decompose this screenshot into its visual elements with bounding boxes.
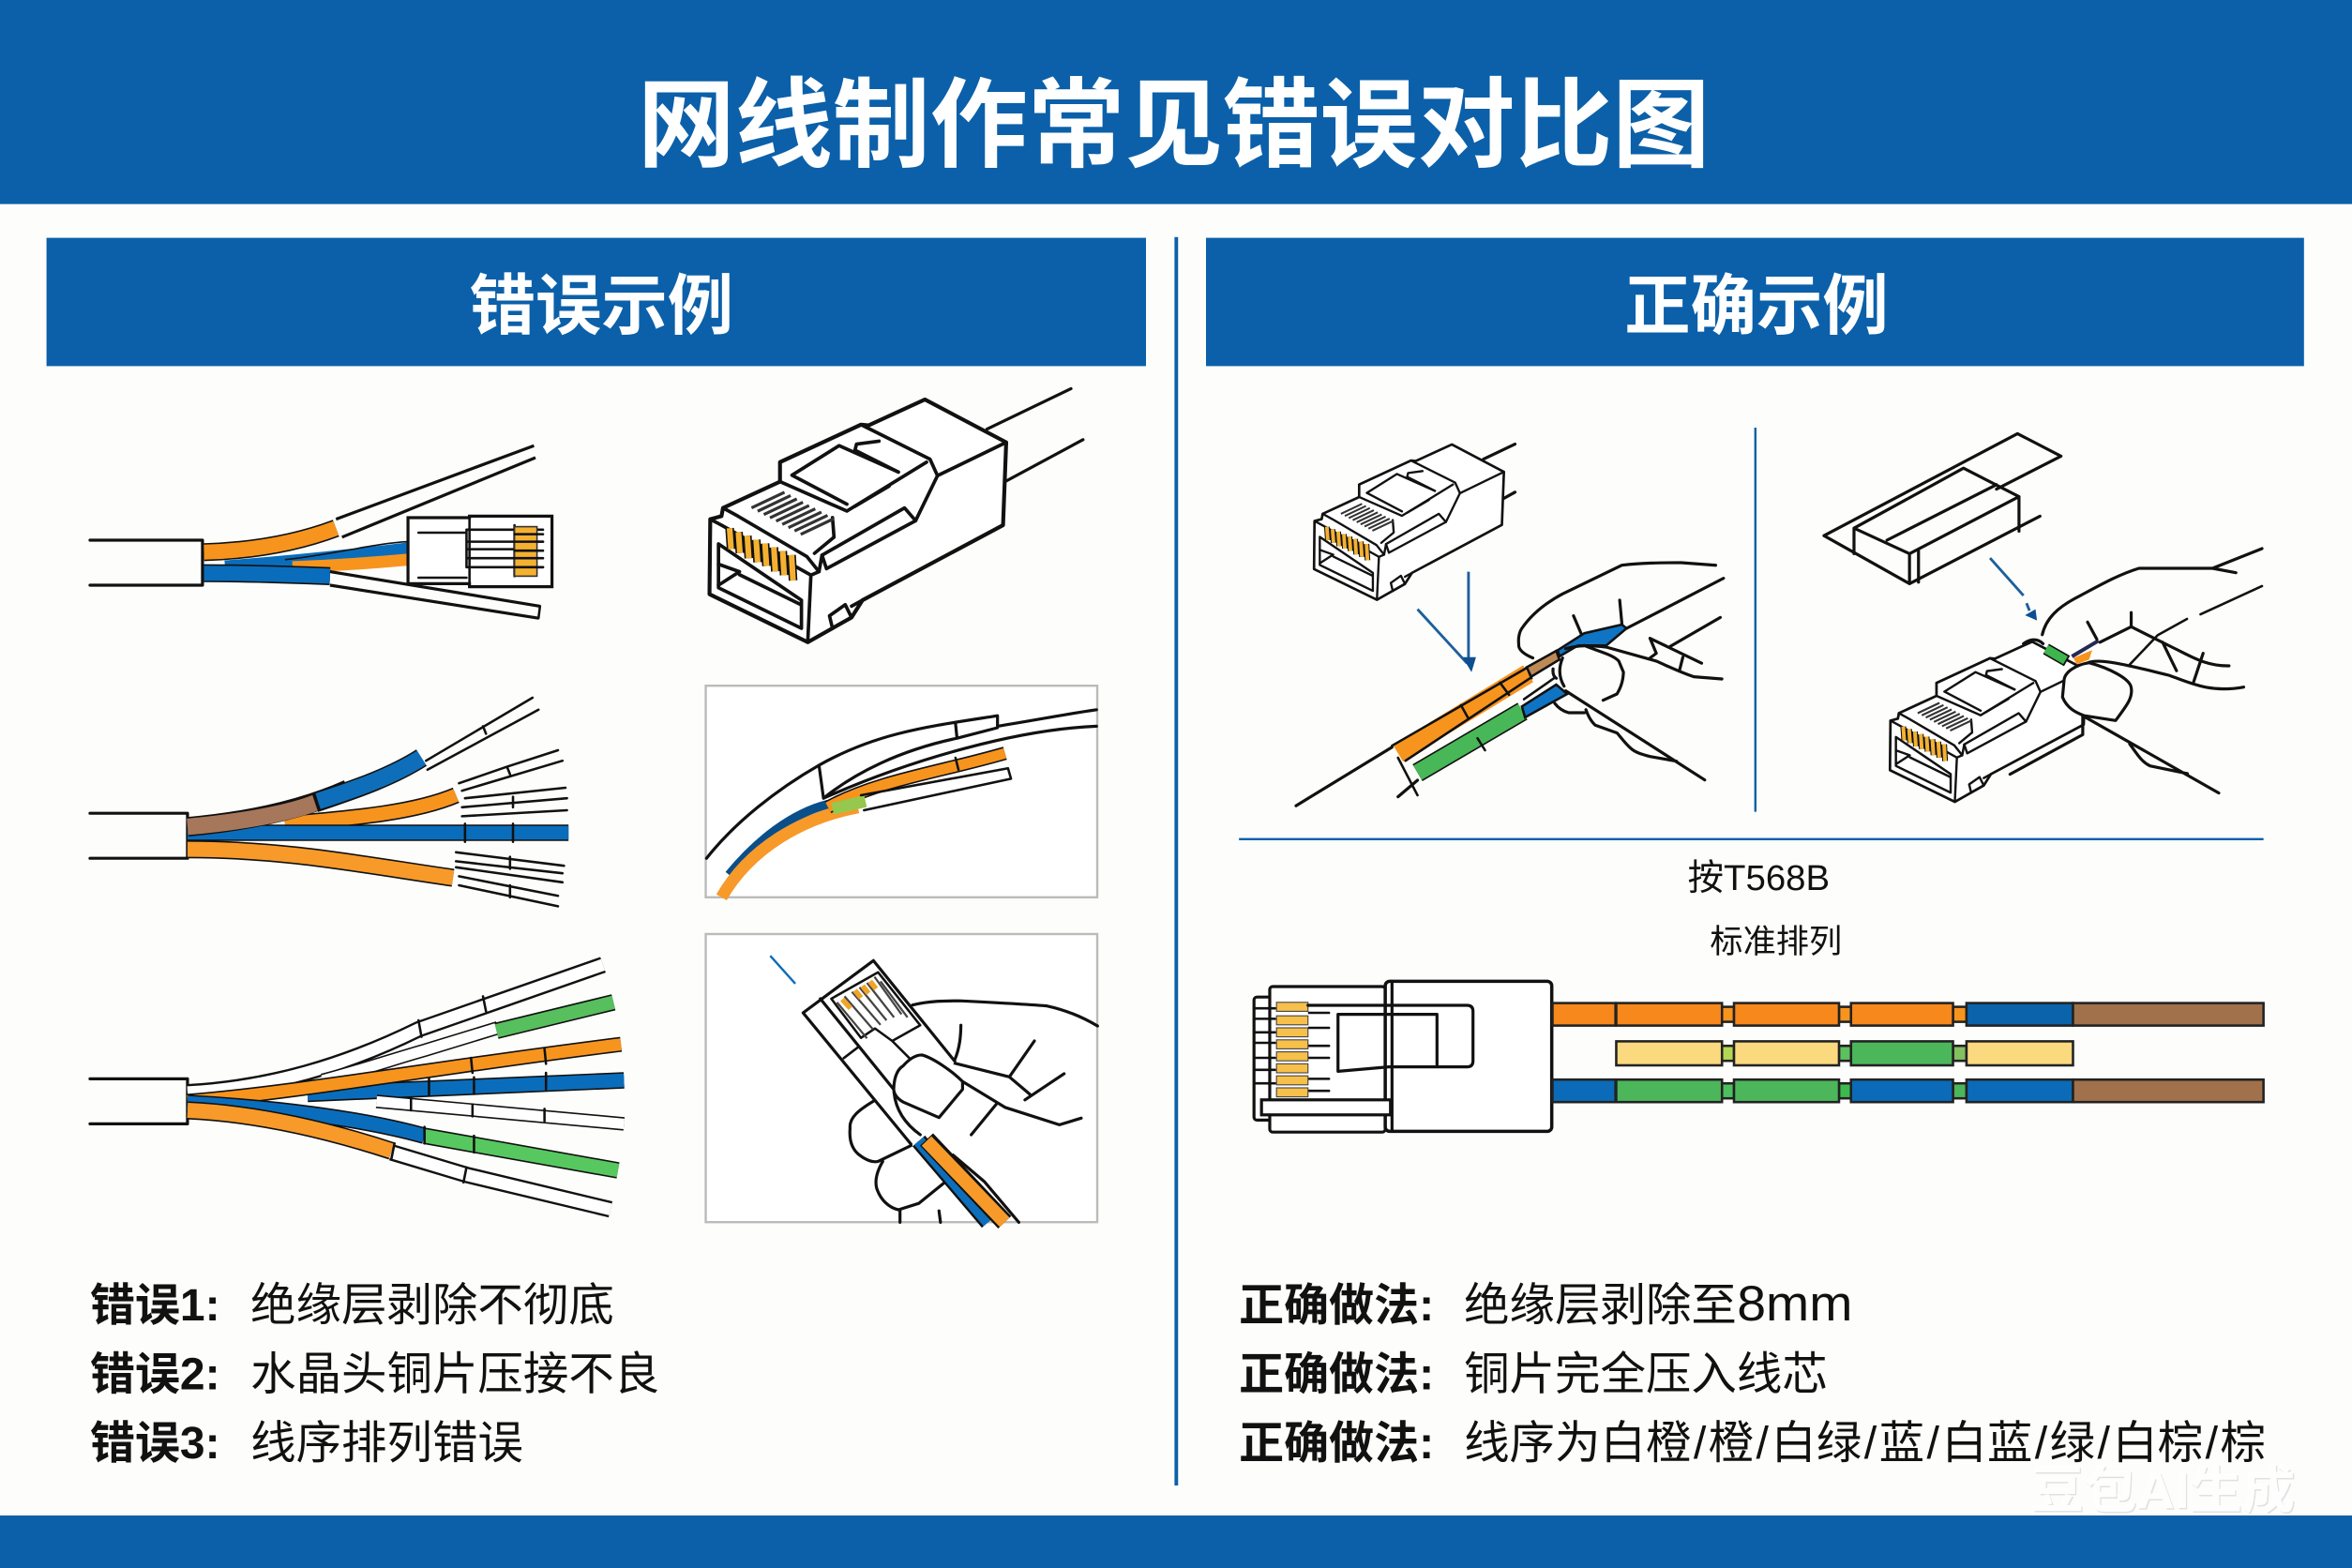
T568B caption: 按T568B	[1688, 858, 1830, 898]
correct 1: 绝缘层剥除至	[1464, 1280, 1737, 1331]
error 1: 绝缘层剥除不彻底	[250, 1280, 614, 1331]
error 1: 错误1:	[90, 1281, 220, 1331]
wire row 2	[1616, 1041, 2073, 1065]
wire row 3	[1552, 1079, 2264, 1102]
watermark: 豆包AI生成	[2032, 1463, 2296, 1520]
thumb	[894, 1055, 962, 1118]
correct 2: 铜片完全压入线芯	[1464, 1349, 1828, 1400]
flat connector box	[1824, 433, 2061, 583]
T568B caption: 标准排列	[1710, 924, 1842, 960]
watermark: 豆包AI生成	[2031, 1462, 2295, 1519]
inset box: crimping defect	[706, 686, 1097, 897]
title: 网线制作常见错误对比图	[638, 72, 1710, 181]
wire diagram: error 2 frayed conductors	[90, 698, 568, 906]
error 3	[90, 1418, 523, 1469]
wire diagram: error 3 wrong order	[90, 965, 624, 1210]
correct 1: 正确做法:	[1239, 1281, 1434, 1331]
panel header: wrong examples	[47, 238, 1146, 366]
gold pins	[1276, 1003, 1308, 1097]
arrows toward wire	[1418, 572, 1476, 672]
plug in hand, lower right	[1890, 640, 2099, 802]
wire row 1	[1552, 1003, 2264, 1026]
fingers behind plug	[850, 1090, 943, 1222]
correct 1: 8mm	[1737, 1276, 1852, 1332]
wire diagram: error 1 insulation	[90, 445, 540, 618]
panel header: correct examples: 正确示例	[1624, 268, 1889, 342]
horizontal divider	[1239, 838, 2264, 840]
inset box: hand holding plug	[706, 934, 1097, 1222]
correct practice list	[1239, 1276, 2266, 1469]
error 2: 错误2:	[90, 1350, 220, 1400]
centre divider	[1174, 237, 1178, 1485]
correct 2: 正确做法:	[1239, 1350, 1434, 1400]
correct 3: 线序为白橙/橙/白绿/蓝/白蓝/绿/白棕/棕	[1464, 1418, 2266, 1469]
arrow toward plug	[1990, 558, 2037, 621]
large RJ45 plug	[710, 388, 1083, 642]
title banner	[0, 0, 2352, 204]
error 1	[90, 1280, 614, 1331]
hand	[1518, 563, 1724, 658]
correct 1	[1239, 1276, 1852, 1332]
plug in hand	[803, 960, 955, 1144]
hand pinching coloured wires	[1296, 563, 1724, 806]
error list	[90, 1280, 659, 1469]
blue tick	[770, 956, 795, 984]
cable in hand	[919, 1141, 988, 1222]
colour-coded wire rows	[1552, 1003, 2264, 1102]
hand back	[912, 1001, 1097, 1135]
T568B caption	[1688, 858, 1842, 960]
panel header: wrong examples: 错误示例	[470, 268, 733, 342]
hand pinching plug	[2043, 549, 2262, 793]
T568B connector side view	[1254, 981, 1552, 1132]
error 3: 错误3:	[90, 1419, 220, 1469]
error 3: 线序排列错误	[250, 1418, 523, 1469]
correct 2	[1239, 1349, 1828, 1400]
plug with straight cable, upper left of correct panel	[1314, 445, 1515, 600]
footer band	[0, 1515, 2352, 1568]
correct 3: 正确做法:	[1239, 1419, 1434, 1469]
error 2: 水晶头铜片压接不良	[250, 1349, 659, 1400]
inner vertical divider	[1755, 428, 1756, 812]
small connector beside error 1 wire	[408, 516, 552, 587]
panel header: correct examples	[1206, 238, 2304, 366]
